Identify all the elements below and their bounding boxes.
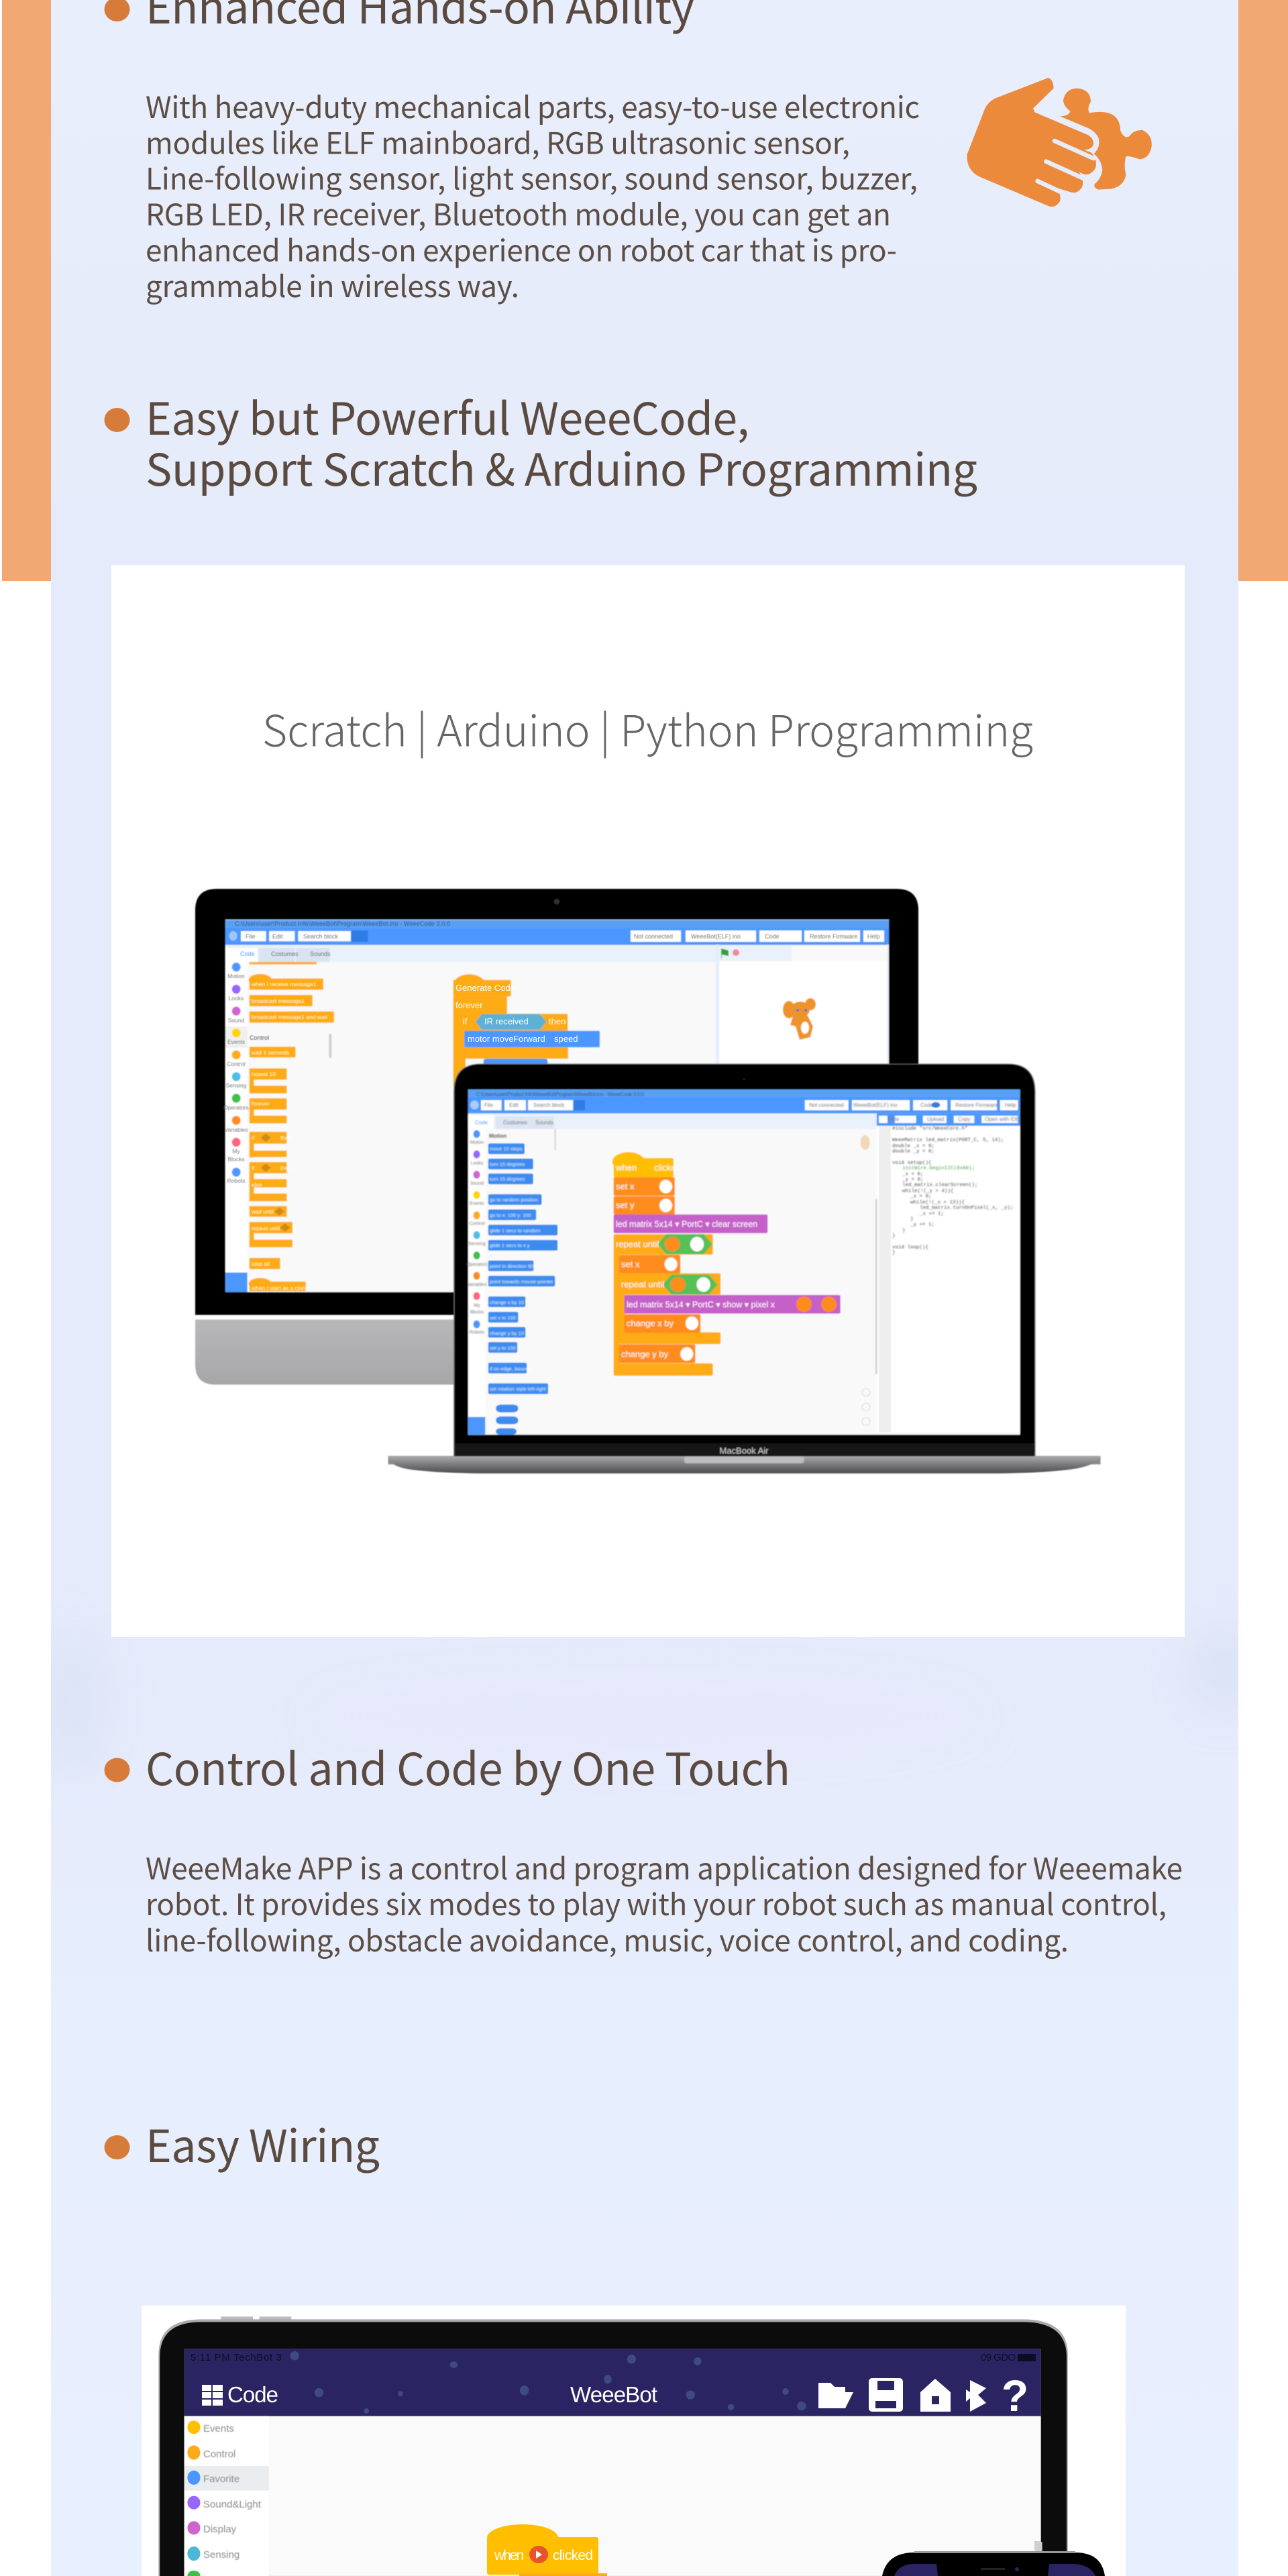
icon: hand holding puzzle piece xyxy=(967,78,1152,207)
laptop screen labels: Code xyxy=(920,1102,934,1108)
monitor screen labels: Variables xyxy=(225,1126,248,1133)
laptop screen labels: WeeeBot(ELF) ino xyxy=(853,1102,898,1108)
sidebar labels: Events xyxy=(203,2423,234,2434)
laptop screen labels: Search block xyxy=(533,1102,565,1108)
monitor screen labels: Looks xyxy=(229,995,244,1002)
icon: code blocks xyxy=(202,2385,223,2406)
monitor screen labels: Search block xyxy=(303,933,339,940)
monitor screen labels: Events xyxy=(227,1038,245,1045)
icon: save disk xyxy=(869,2378,903,2412)
arduino code listing: void loop(){ xyxy=(892,1245,928,1250)
monitor screen labels: then xyxy=(280,1165,292,1171)
monitor code block labels: motor move xyxy=(468,1034,514,1044)
tablet app bar title: WeeeBot xyxy=(570,2382,657,2407)
monitor screen labels: else xyxy=(252,1181,262,1188)
icon: help question mark: ? xyxy=(1002,2371,1028,2420)
laptop screen labels: Code xyxy=(475,1120,488,1126)
monitor code block labels: then xyxy=(549,1016,566,1026)
arduino code listing: while(!(_y > 4)){ xyxy=(902,1189,954,1194)
tablet app bar title: Code xyxy=(227,2382,278,2407)
arduino code listing: } xyxy=(892,1250,896,1256)
block labels: repeat until xyxy=(616,1239,659,1249)
laptop screen labels: set x to 100 xyxy=(490,1315,516,1321)
arduino code listing: WeeeMatrix led_matrix(PORT_C, 5, 14); xyxy=(892,1138,1004,1143)
laptop screen labels: point towards mouse-pointer xyxy=(490,1279,553,1285)
monitor screen labels: wait until xyxy=(251,1208,274,1215)
arduino code listing: while(!(_x > 13)){ xyxy=(910,1200,965,1205)
block: when clicked: clicked xyxy=(553,2548,593,2563)
laptop screen labels: Help xyxy=(1005,1102,1016,1108)
arduino code listing: void setup(){ xyxy=(892,1161,932,1166)
laptop screen labels: Open with IDE xyxy=(985,1116,1020,1122)
monitor screen labels: then xyxy=(280,1134,292,1141)
monitor screen labels: Costumes xyxy=(271,951,299,957)
laptop screen labels: Sensing xyxy=(468,1242,486,1246)
arduino code listing: initWire.beginIIC(0xA0); xyxy=(902,1166,975,1171)
code stack xyxy=(612,1152,841,1376)
device: MacBook Air laptop xyxy=(388,1064,1101,1473)
laptop screen labels: Looks xyxy=(471,1161,484,1166)
text block: app description: WeeeMake APP is a control and program application designed for Weeemake xyxy=(146,1845,1183,1888)
text block: app description: robot. It provides six modes to play with your robot such as manual control, xyxy=(146,1881,1167,1924)
text block: hands-on description: Line-following sensor, light sensor, sound sensor, buzzer, xyxy=(146,156,918,199)
laptop screen labels: turn 15 degrees xyxy=(490,1161,525,1167)
text block: app description xyxy=(146,1845,1183,1960)
laptop screen labels: Hide xyxy=(888,1116,900,1122)
laptop screen labels: go to x: 100 y: 100 xyxy=(490,1212,531,1218)
block labels: set y xyxy=(616,1200,635,1210)
laptop screen labels: Upload xyxy=(927,1116,944,1122)
laptop screen labels: Motion xyxy=(470,1140,484,1145)
monitor screen labels: C:\Users\user\Product Info\WeeeBot\Program\WeeeBot.ino - WeeeCode 3.0.0 xyxy=(235,920,450,927)
monitor screen labels: My xyxy=(232,1148,240,1155)
arduino code listing: } xyxy=(910,1217,914,1222)
sidebar labels: Sound&Light xyxy=(203,2499,262,2510)
text block: hands-on description: enhanced hands-on experience on robot car that is pro- xyxy=(146,227,897,270)
monitor screen labels: broadcast message1 xyxy=(252,998,305,1004)
arduino code listing: _x = 0; xyxy=(902,1172,924,1177)
monitor screen labels: repeat until xyxy=(252,1225,280,1232)
monitor screen labels: Sounds xyxy=(310,951,331,957)
device: phone corner xyxy=(882,2541,1105,2576)
card title: Scratch | Arduino | Python Programming xyxy=(262,698,1033,759)
laptop screen labels: Operators xyxy=(466,1263,488,1267)
block labels: repeat until xyxy=(621,1279,664,1289)
laptop screen labels: change y by 10 xyxy=(490,1330,524,1336)
monitor screen labels: Motion xyxy=(227,973,245,979)
monitor code block labels: Generate Code xyxy=(455,983,515,993)
monitor screen labels: Restore Firmware xyxy=(810,933,858,940)
laptop screen labels: move 10 steps xyxy=(490,1146,523,1152)
laptop screen labels: turn 15 degrees xyxy=(490,1176,525,1182)
laptop screen labels: Copy xyxy=(958,1116,971,1122)
monitor screen labels: if xyxy=(252,1134,255,1141)
device: tablet with WeeeBot app xyxy=(158,2316,1068,2576)
panel: white programming card xyxy=(111,565,1185,1637)
laptop screen labels: Sounds xyxy=(535,1120,553,1126)
laptop screen labels: Edit xyxy=(509,1102,519,1108)
block: when clicked: when xyxy=(494,2548,524,2563)
block labels: led matrix 5x14 ▾ PortC ▾ show ▾ pixel x xyxy=(627,1300,775,1309)
laptop screen labels: glide 1 secs to random xyxy=(490,1228,540,1234)
sidebar labels: Display xyxy=(203,2524,237,2535)
monitor screen labels: WeeeBot(ELF) ino xyxy=(691,933,741,940)
tablet status bar: 09 GDO xyxy=(981,2352,1016,2363)
arduino code listing: led_matrix.turnOnPixel(_x, _y); xyxy=(920,1205,1014,1211)
laptop screen labels: Variables xyxy=(468,1283,487,1287)
sidebar labels: Control xyxy=(203,2449,235,2460)
laptop screen labels xyxy=(466,1091,1020,1392)
block labels: clicked xyxy=(654,1163,681,1173)
laptop screen labels: if on edge, bounce xyxy=(490,1366,531,1372)
arduino code listing: _x = 0; xyxy=(910,1194,932,1199)
laptop screen labels: point in direction 90 xyxy=(490,1263,533,1269)
monitor screen labels: broadcast message1 and wait xyxy=(252,1014,328,1020)
sidebar labels: Favorite xyxy=(203,2473,239,2485)
section heading: Easy Wiring: Easy Wiring xyxy=(146,2111,380,2176)
icon: home xyxy=(920,2379,951,2412)
monitor screen labels: Not connected xyxy=(634,933,673,940)
monitor code block labels: if xyxy=(463,1016,468,1026)
laptop screen labels: File xyxy=(484,1102,493,1108)
monitor body xyxy=(195,889,918,1385)
laptop body xyxy=(388,1064,1101,1473)
tablet app bar title xyxy=(227,2382,657,2407)
icon: folder xyxy=(818,2383,853,2408)
laptop screen labels: change x by 10 xyxy=(490,1299,524,1305)
section heading: Easy but Powerful WeeeCode xyxy=(105,384,977,499)
laptop brand label: MacBook Air xyxy=(720,1446,769,1456)
monitor screen labels: stop all xyxy=(252,1260,270,1267)
section heading: Control and Code by One Touch: Control and Code by One Touch xyxy=(146,1734,790,1799)
laptop screen labels: My xyxy=(474,1303,480,1308)
arduino code listing: } xyxy=(892,1234,896,1239)
arduino code listing: double _y = 0; xyxy=(892,1149,934,1155)
text block: app description: line-following, obstacle avoidance, music, voice control, and coding. xyxy=(146,1917,1069,1960)
block labels: led matrix 5x14 ▾ PortC ▾ clear screen xyxy=(616,1220,757,1229)
arduino code listing: _y = 0; xyxy=(902,1177,924,1183)
monitor screen labels: Control xyxy=(227,1061,246,1067)
palette blocks xyxy=(488,1143,557,1435)
monitor screen labels: Help xyxy=(867,933,880,940)
icon: bluetooth off xyxy=(966,2380,986,2412)
laptop screen labels: Sound xyxy=(470,1181,484,1186)
monitor screen labels: when I start as a clone xyxy=(251,1285,309,1291)
monitor code block labels: IR received xyxy=(484,1016,529,1026)
monitor screen labels: Sensing xyxy=(226,1082,247,1089)
panel: orange side strips xyxy=(2,0,1288,581)
laptop screen labels: Restore Firmware xyxy=(955,1102,998,1108)
laptop screen labels: Robots xyxy=(470,1330,485,1335)
block labels: change x by xyxy=(627,1318,674,1328)
tablet status bar xyxy=(191,2352,1036,2363)
monitor screen labels: if xyxy=(252,1165,255,1171)
text block: hands-on description: modules like ELF mainboard, RGB ultrasonic sensor, xyxy=(146,119,850,162)
text block: hands-on description: grammable in wireless way. xyxy=(146,263,519,306)
text block: hands-on description xyxy=(146,84,920,306)
laptop screen labels: set y to 100 xyxy=(490,1345,516,1351)
monitor code block labels: Forward xyxy=(513,1034,545,1044)
monitor code block labels xyxy=(455,983,578,1044)
tablet status bar: 5:11 PM TechBot 3 xyxy=(191,2352,282,2363)
sidebar labels xyxy=(203,2423,262,2561)
block labels: set x xyxy=(621,1259,640,1269)
block labels: when xyxy=(615,1163,637,1173)
monitor screen labels: Blocks xyxy=(227,1156,245,1163)
monitor code block labels: speed xyxy=(554,1034,578,1044)
panel: white tablet card xyxy=(142,2306,1126,2576)
laptop screen labels: Not connected xyxy=(809,1102,844,1108)
arduino code listing xyxy=(892,1126,1014,1256)
monitor screen labels: Code xyxy=(240,951,255,957)
monitor screen labels: Robots xyxy=(227,1177,245,1184)
laptop screen labels: Control xyxy=(470,1222,485,1226)
laptop screen labels: Motion xyxy=(489,1133,506,1139)
arduino code listing: } xyxy=(902,1228,906,1234)
monitor screen labels: Sound xyxy=(228,1017,245,1024)
arduino code listing: #include "src/WeeeCore.h" xyxy=(892,1126,968,1132)
monitor screen labels: Control xyxy=(250,1034,269,1041)
monitor screen labels: Code xyxy=(765,933,780,940)
block labels: change y by xyxy=(621,1349,669,1359)
arduino code listing: double _x = 0; xyxy=(892,1144,934,1149)
arduino code listing: _x += 1; xyxy=(919,1212,944,1217)
monitor screen labels: repeat 10 xyxy=(252,1071,276,1077)
monitor screen contents xyxy=(225,920,889,1292)
device: desktop monitor with WeeeCode xyxy=(195,889,918,1385)
laptop screen labels: Blocks xyxy=(470,1310,484,1315)
laptop screen labels: go to random position xyxy=(490,1197,538,1203)
monitor screen labels: File xyxy=(246,933,256,940)
mascot: orange elephant xyxy=(783,998,816,1040)
laptop screen labels: glide 1 secs to x y xyxy=(490,1242,530,1248)
block labels: set x xyxy=(616,1181,635,1191)
block labels xyxy=(615,1163,775,1359)
sidebar labels: Sensing xyxy=(203,2549,239,2561)
monitor screen labels: forever xyxy=(252,1100,270,1107)
laptop screen labels: set rotation style left-right xyxy=(490,1386,547,1392)
text block: hands-on description: With heavy-duty mechanical parts, easy-to-use electronic xyxy=(146,84,920,127)
block: when clicked xyxy=(487,2524,607,2576)
laptop screen labels: Costumes xyxy=(503,1120,527,1126)
side category dots xyxy=(473,1130,480,1328)
monitor screen labels: Operators xyxy=(223,1104,249,1111)
arduino code listing: led_matrix.clearScreen(); xyxy=(902,1183,978,1188)
arduino code listing: _y += 1; xyxy=(910,1222,934,1228)
section heading: Easy but Powerful WeeeCode: Easy but Powerful WeeeCode, xyxy=(146,384,749,448)
laptop screen xyxy=(468,1089,1020,1435)
text block: hands-on description: RGB LED, IR receiver, Bluetooth module, you can get an xyxy=(146,191,891,234)
section heading: Easy but Powerful WeeeCode: Support Scratch & Arduino Programming xyxy=(146,435,977,499)
laptop screen labels: C:\Users\user\Product Info\WeeeBot\Program\WeeeBot.ino - WeeeCode 3.0.0 xyxy=(476,1091,645,1097)
monitor screen labels: Edit xyxy=(272,933,283,940)
laptop screen labels: Events xyxy=(470,1201,484,1206)
monitor screen labels xyxy=(223,920,880,1291)
monitor screen labels: when I receive message1 xyxy=(251,981,317,987)
monitor screen labels: wait 1 seconds xyxy=(251,1049,289,1056)
monitor code block labels: forever xyxy=(455,1000,483,1010)
screen toolbar and tabs on the right xyxy=(631,930,889,1064)
